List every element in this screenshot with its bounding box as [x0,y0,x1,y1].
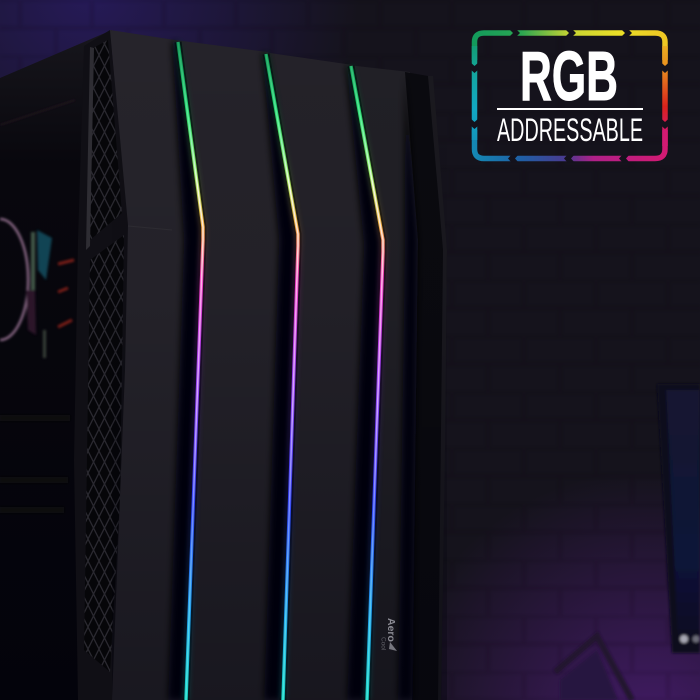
wall monitor [657,384,700,653]
badge heading: RGB: RGB [520,37,618,115]
front angle crease [128,226,172,230]
side panel interior [0,219,74,358]
upper mesh grille [90,40,122,240]
front grille frame [74,30,128,700]
body shading [112,30,447,700]
lower mesh grille [84,235,124,672]
badge frame [474,33,665,158]
front panel 1 [110,30,205,700]
brand logo: Aero [385,618,397,642]
light strip glow [178,42,383,700]
badge: rgb addressable [470,29,670,163]
badge divider [497,108,643,110]
brand logo: Cool [380,637,386,651]
side glass panel [0,30,112,700]
grille highlight edge [86,47,94,250]
right side edge [405,72,447,700]
badge frame gaps [470,29,670,163]
front panel 2 [175,40,300,700]
light strip 3 [351,66,383,700]
foreground desk object [555,636,632,700]
light strip 2 [266,54,298,700]
brand logo [380,618,397,651]
dark channels beside strips [168,42,418,700]
front panel 4 [348,65,420,700]
light strip 1 [178,42,203,700]
front panel 3 [263,52,386,700]
pc case [0,30,447,700]
light strip shadow edges [178,42,383,700]
